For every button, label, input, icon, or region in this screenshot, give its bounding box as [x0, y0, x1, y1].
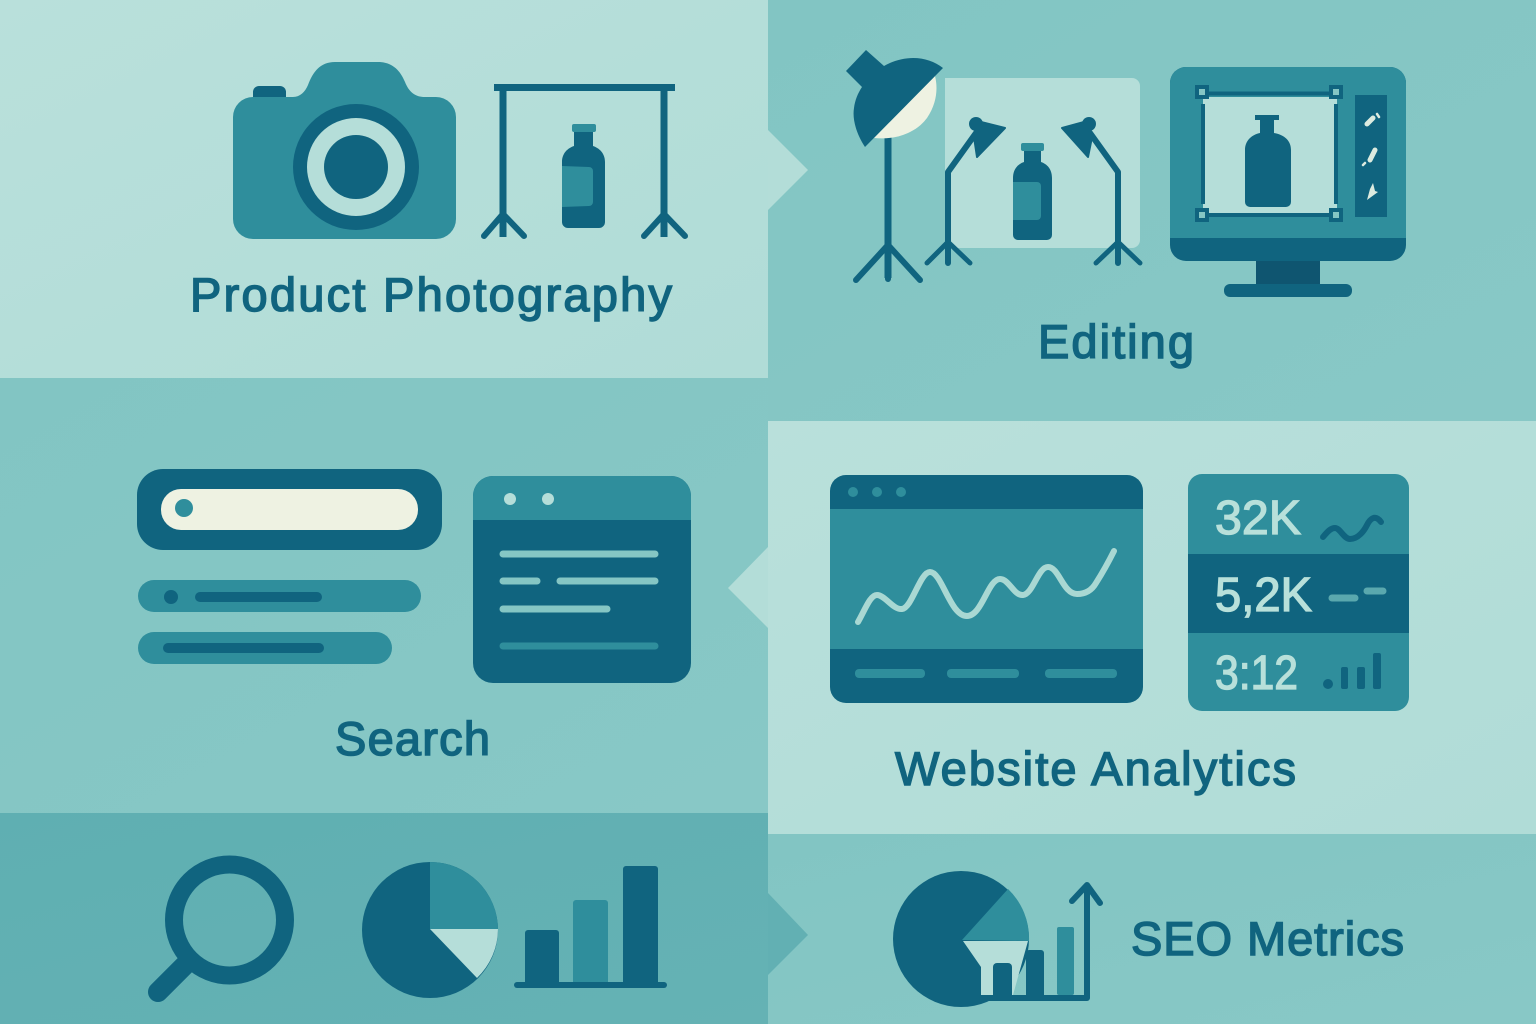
footer bars	[855, 669, 1117, 678]
arrow: analytics to search	[728, 547, 768, 628]
backdrop sheet	[945, 78, 1140, 248]
panel: search tools	[0, 813, 768, 1024]
icon: monitor	[1170, 67, 1406, 297]
crop handles	[1197, 87, 1341, 220]
sparkline	[1323, 518, 1381, 539]
heading: search: Search	[335, 712, 490, 765]
line chart	[858, 551, 1114, 622]
search bar	[137, 469, 442, 550]
panel: seo metrics	[768, 834, 1536, 1024]
search result one	[138, 580, 421, 612]
icon: large studio lamp	[846, 50, 943, 280]
mini bar chart	[1323, 653, 1381, 689]
stat: 3:12: 3:12	[1215, 647, 1298, 700]
pie chart	[362, 862, 498, 998]
icon: bottle	[562, 124, 605, 228]
tool panel	[1355, 95, 1387, 217]
heading: product photography: Product Photography	[190, 268, 672, 321]
crop frame	[1203, 94, 1336, 215]
stat: 5,2K: 5,2K	[1215, 569, 1312, 622]
panel: product photography	[0, 0, 768, 378]
stat cards	[1188, 474, 1409, 711]
icon: left small lamp	[927, 117, 1005, 263]
arrow: photography to editing	[768, 130, 808, 210]
image canvas	[1203, 97, 1337, 213]
icon: seo pie and growth chart	[893, 871, 1100, 1007]
search result two	[138, 632, 392, 664]
heading: editing: Editing	[1038, 315, 1194, 368]
icon: magnifying glass	[158, 864, 285, 992]
icon: camera	[233, 62, 456, 239]
heading: website analytics: Website Analytics	[895, 742, 1296, 795]
panel: editing	[768, 0, 1536, 421]
analytics window	[830, 475, 1143, 703]
panel: website analytics	[768, 421, 1536, 834]
bar chart	[514, 866, 667, 988]
icon: backdrop stand	[484, 84, 685, 237]
heading: seo metrics: SEO Metrics	[1131, 912, 1404, 965]
icon: studio bottle	[1013, 143, 1052, 240]
stat: 32K: 32K	[1215, 492, 1301, 545]
icon: right small lamp	[1062, 117, 1140, 263]
browser window	[473, 476, 691, 683]
panel: search	[0, 378, 768, 813]
arrow: search tools to seo metrics	[768, 893, 808, 975]
dash trend	[1332, 591, 1383, 598]
bottle on screen	[1245, 115, 1291, 207]
